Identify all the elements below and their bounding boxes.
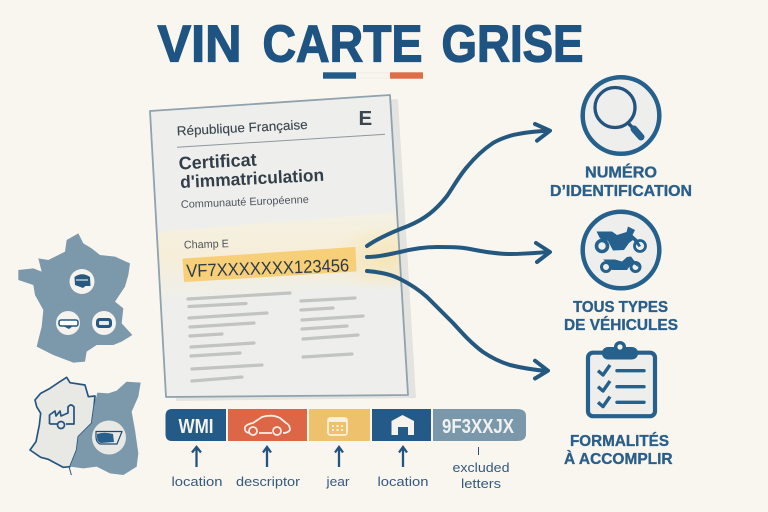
map: region split (30, 377, 141, 475)
label: descriptor (236, 447, 301, 489)
label: descriptor: descriptor (236, 474, 301, 489)
text placeholder lines: right column (301, 298, 363, 357)
field label: Champ E (184, 238, 229, 251)
icon: headlight (92, 420, 126, 454)
arrow labels under VIN bar (172, 447, 510, 491)
highlighted field band (156, 212, 402, 300)
icon: motorcycles (583, 212, 659, 288)
arrow: to identification (367, 124, 550, 246)
certificate title: Certificat (178, 150, 257, 173)
panel: registration certificate: d'immatriculation (180, 165, 325, 192)
title: CARTE (262, 16, 422, 74)
label: tous types de véhicules: DE VÉHICULES (564, 315, 678, 334)
map icon: top (70, 269, 94, 294)
segment: excluded letters (433, 409, 526, 441)
label: formalités à accomplir: À ACCOMPLIR (564, 449, 673, 468)
label: location 2 (378, 447, 428, 489)
title: GRISE (442, 16, 584, 74)
segment: WMI (166, 409, 226, 441)
segment: excluded letters: 9F3XXJX (442, 416, 515, 438)
label: excluded letters (452, 447, 510, 491)
label: numéro d'identification (550, 162, 692, 200)
label: tous types de véhicules: TOUS TYPES (573, 299, 668, 316)
segment: calendar (309, 409, 370, 441)
letter E: E (358, 107, 372, 130)
segment: plant (372, 409, 431, 441)
VIN highlight (184, 248, 356, 281)
map icon: bottom right (92, 311, 116, 335)
label: excluded letters: excluded (452, 460, 510, 475)
top motorcycle (596, 226, 646, 252)
label: year (325, 447, 350, 489)
title: VIN (158, 16, 242, 74)
segment: car descriptor (228, 409, 307, 441)
VIN number: VF7XXXXXXX123456 (186, 255, 350, 281)
flag underline (323, 72, 423, 79)
label: formalités à accomplir: FORMALITÉS (570, 431, 669, 450)
VIN decoding bar (166, 409, 526, 441)
label: year: jear (325, 474, 350, 489)
label: location 2: location (378, 474, 428, 489)
label: tous types de véhicules (564, 299, 678, 334)
map icon: bottom left (56, 311, 80, 335)
community text: Communauté Européenne (181, 194, 309, 211)
segment: WMI: WMI (178, 416, 214, 438)
icon: magnifier (583, 77, 659, 154)
label: formalités à accomplir (564, 431, 673, 468)
icon: factory (50, 405, 74, 428)
arrow: to vehicle types (367, 243, 550, 262)
label: numéro d'identification: D’IDENTIFICATION (550, 183, 692, 200)
label: excluded letters: letters (461, 476, 502, 491)
bottom motorcycle (602, 256, 640, 272)
title (158, 16, 584, 74)
label: numéro d'identification: NUMÉRO (585, 162, 657, 182)
text placeholder lines: left column (188, 293, 290, 381)
certificate header: République Française (176, 117, 308, 138)
panel: registration certificate (150, 95, 440, 401)
icon: clipboard checklist (588, 341, 655, 416)
map: France with icons (18, 233, 132, 363)
arrow: to formalities (367, 271, 548, 378)
label: location (172, 447, 222, 489)
label: location: location (172, 474, 222, 489)
